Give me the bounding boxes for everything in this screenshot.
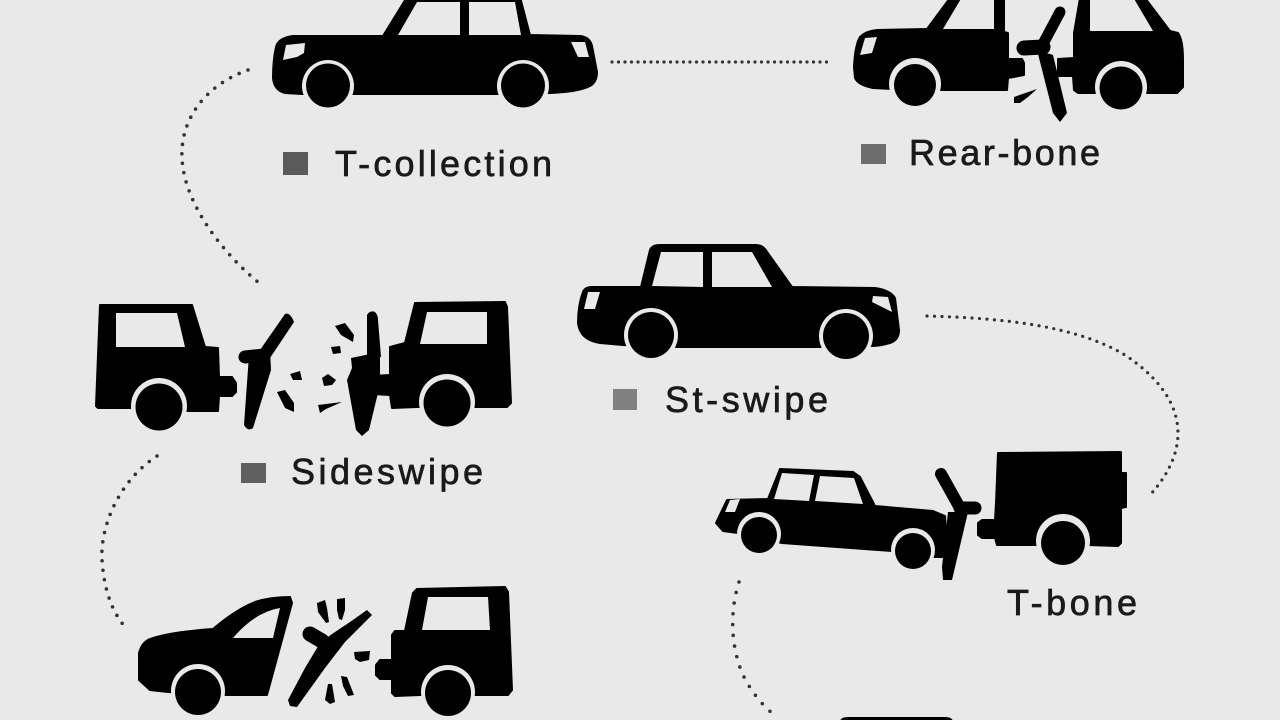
label: Rear-bone: Rear-bone bbox=[909, 132, 1100, 173]
trailer bbox=[978, 452, 1126, 546]
car pair: Sideswipe bbox=[96, 302, 511, 436]
tilted car bbox=[716, 469, 948, 557]
right car bbox=[1058, 0, 1183, 93]
label: St-swipe: St-swipe bbox=[665, 379, 828, 420]
label: T-collection: T-collection bbox=[335, 143, 552, 184]
headlights bbox=[283, 42, 589, 60]
debris bbox=[317, 600, 329, 623]
label: T-bone: T-bone bbox=[1007, 582, 1137, 623]
left broken bone bbox=[260, 314, 294, 358]
broken bone bbox=[1044, 12, 1060, 42]
car pair: Rear-bone bbox=[854, 0, 1183, 122]
car: St-swipe bbox=[578, 245, 899, 363]
left car bbox=[139, 597, 292, 695]
partial vehicle at bottom edge bbox=[840, 717, 953, 720]
dotted connector: right curve bbox=[927, 316, 1178, 495]
debris bbox=[335, 323, 354, 342]
left truck bbox=[96, 305, 236, 411]
dotted connector: left lower curve bbox=[102, 456, 157, 628]
wheels bbox=[302, 60, 354, 112]
right truck bbox=[373, 302, 511, 408]
car: T-collection bbox=[273, 0, 597, 112]
dotted connector: top straight bbox=[612, 60, 832, 64]
windows bbox=[652, 252, 772, 287]
label: Sideswipe: Sideswipe bbox=[291, 451, 483, 492]
car pair: T-bone bbox=[716, 452, 1126, 580]
broken bone bbox=[288, 610, 372, 707]
wheels bbox=[624, 308, 678, 362]
car pair: bottom collision bbox=[139, 587, 512, 719]
left car bbox=[854, 0, 1024, 90]
windows bbox=[398, 2, 521, 35]
debris bbox=[1014, 89, 1037, 103]
right broken bone bbox=[367, 311, 381, 357]
dotted connector: lower right curve bbox=[733, 582, 778, 718]
headlights bbox=[584, 292, 892, 312]
dotted connector: top-left curve bbox=[182, 70, 258, 282]
right truck bbox=[376, 587, 512, 696]
broken bone bbox=[941, 474, 960, 508]
